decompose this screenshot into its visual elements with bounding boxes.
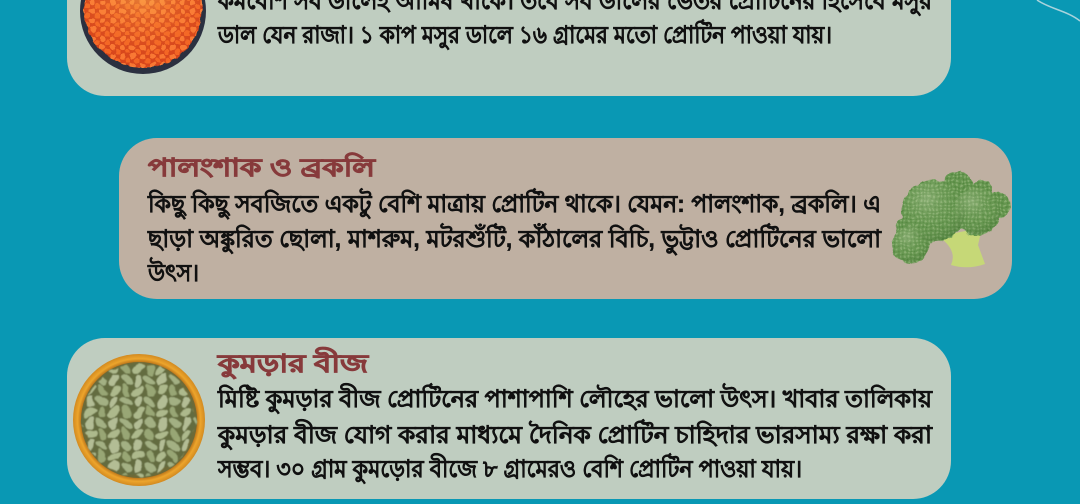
panel background: pumpkin seeds [67, 338, 951, 499]
icon: bowl of pumpkin seeds [73, 354, 205, 486]
text: spinach and broccoli description: কিছু কিছু সবজিতে একটু বেশি মাত্রায় প্রোটিন থাকে। যেমন: পালংশাক, ব্রকলি। এ [147, 188, 881, 219]
icon: bowl of red lentils [80, 0, 206, 74]
text: pumpkin seeds description: মিষ্টি কুমড়ার বীজ প্রোটিনের পাশাপাশি লৌহের ভালো উৎস। খাবার তালিকায় [217, 383, 933, 414]
text: spinach and broccoli description [147, 188, 882, 287]
heading: pumpkin seeds: কুমড়ার বীজ [217, 347, 370, 380]
text: spinach and broccoli description: উৎস। [147, 257, 199, 287]
text: lentils description: ডাল যেন রাজা। ১ কাপ মসুর ডালে ১৬ গ্রামের মতো প্রোটিন পাওয়া যায়। [217, 19, 832, 50]
heading: spinach and broccoli: পালংশাক ও ব্রকলি [148, 152, 377, 182]
panel: spinach and broccoli [119, 138, 1012, 299]
text: pumpkin seeds description: সম্ভব। ৩০ গ্রাম কুমড়োর বীজে ৮ গ্রামেরও বেশি প্রোটিন পাওয়া যায়। [217, 453, 802, 484]
text: lentils description [217, 0, 933, 50]
panel background: lentils [67, 0, 951, 96]
panel: lentils [67, 0, 951, 96]
panel background: spinach and broccoli [119, 138, 1012, 299]
text: spinach and broccoli description: ছাড়া অঙ্কুরিত ছোলা, মাশরুম, মটরশুঁটি, কাঁঠালের বিচি, ভুট্টাও প্রোটিনের ভালো [147, 223, 882, 255]
panel: pumpkin seeds [67, 338, 951, 499]
text: pumpkin seeds description: কুমড়ার বীজ যোগ করার মাধ্যমে দৈনিক প্রোটিন চাহিদার ভারসাম্য রক্ষা করা [217, 419, 933, 450]
icon: broccoli [892, 171, 1010, 267]
text: pumpkin seeds description [217, 383, 933, 484]
decorative curve top right [1037, 0, 1080, 21]
